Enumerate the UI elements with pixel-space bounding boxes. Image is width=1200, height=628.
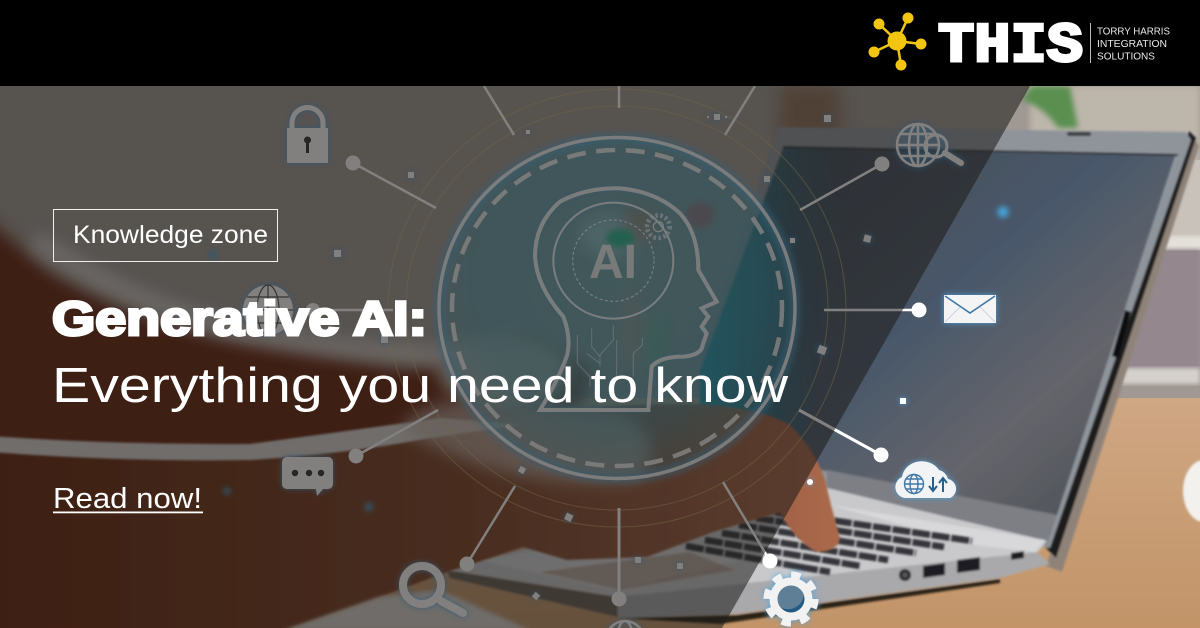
top black header bar — [0, 0, 1200, 86]
logo tagline: TORRY HARRIS — [1097, 26, 1170, 38]
icon: left globe — [243, 285, 293, 335]
floating particles — [334, 114, 906, 600]
logo tagline: INTEGRATION — [1097, 38, 1167, 50]
small gear — [647, 215, 670, 238]
logo divider — [1090, 23, 1091, 63]
logo tagline — [1097, 26, 1170, 62]
icon: bottom globe — [606, 621, 644, 628]
dashed ring — [452, 150, 782, 466]
laptop — [447, 127, 1199, 624]
outer thin rings — [388, 89, 846, 527]
logo: Torry Harris Integration Solutions — [868, 12, 1170, 78]
circuit lines — [577, 325, 642, 387]
logo icon: yellow network — [868, 12, 926, 70]
subheading: Everything you need to know — [52, 359, 789, 413]
icon: globe with magnifier — [897, 124, 961, 166]
tag: Knowledge zone: Knowledge zone — [73, 221, 268, 249]
AI head hologram — [388, 89, 846, 527]
connector lines and dots — [306, 86, 926, 606]
icon: chat bubble — [282, 457, 333, 496]
dark diagonal overlay panel — [0, 86, 1030, 628]
ring glow — [439, 138, 795, 478]
keyboard — [686, 512, 972, 572]
logo tagline: SOLUTIONS — [1097, 50, 1155, 62]
icon: magnifier — [403, 566, 463, 613]
head outline — [535, 188, 717, 410]
main ring — [439, 138, 795, 478]
icon: gear — [767, 575, 815, 623]
brain circle — [553, 203, 673, 319]
icon: padlock — [287, 107, 328, 163]
icon: envelope — [944, 295, 996, 323]
icon: cloud transfer — [895, 461, 956, 498]
AI label: AI — [589, 236, 637, 289]
logo wordmark: THIS — [938, 14, 1083, 78]
hands and sleeves — [0, 401, 840, 628]
blue particles — [209, 206, 1008, 511]
tag: Knowledge zone — [54, 210, 278, 262]
link: Read now: Read now! — [53, 483, 202, 515]
circle core fill — [441, 139, 793, 477]
dotted inner circle — [573, 220, 654, 301]
heading: Generative AI: Generative AI: — [52, 293, 427, 346]
